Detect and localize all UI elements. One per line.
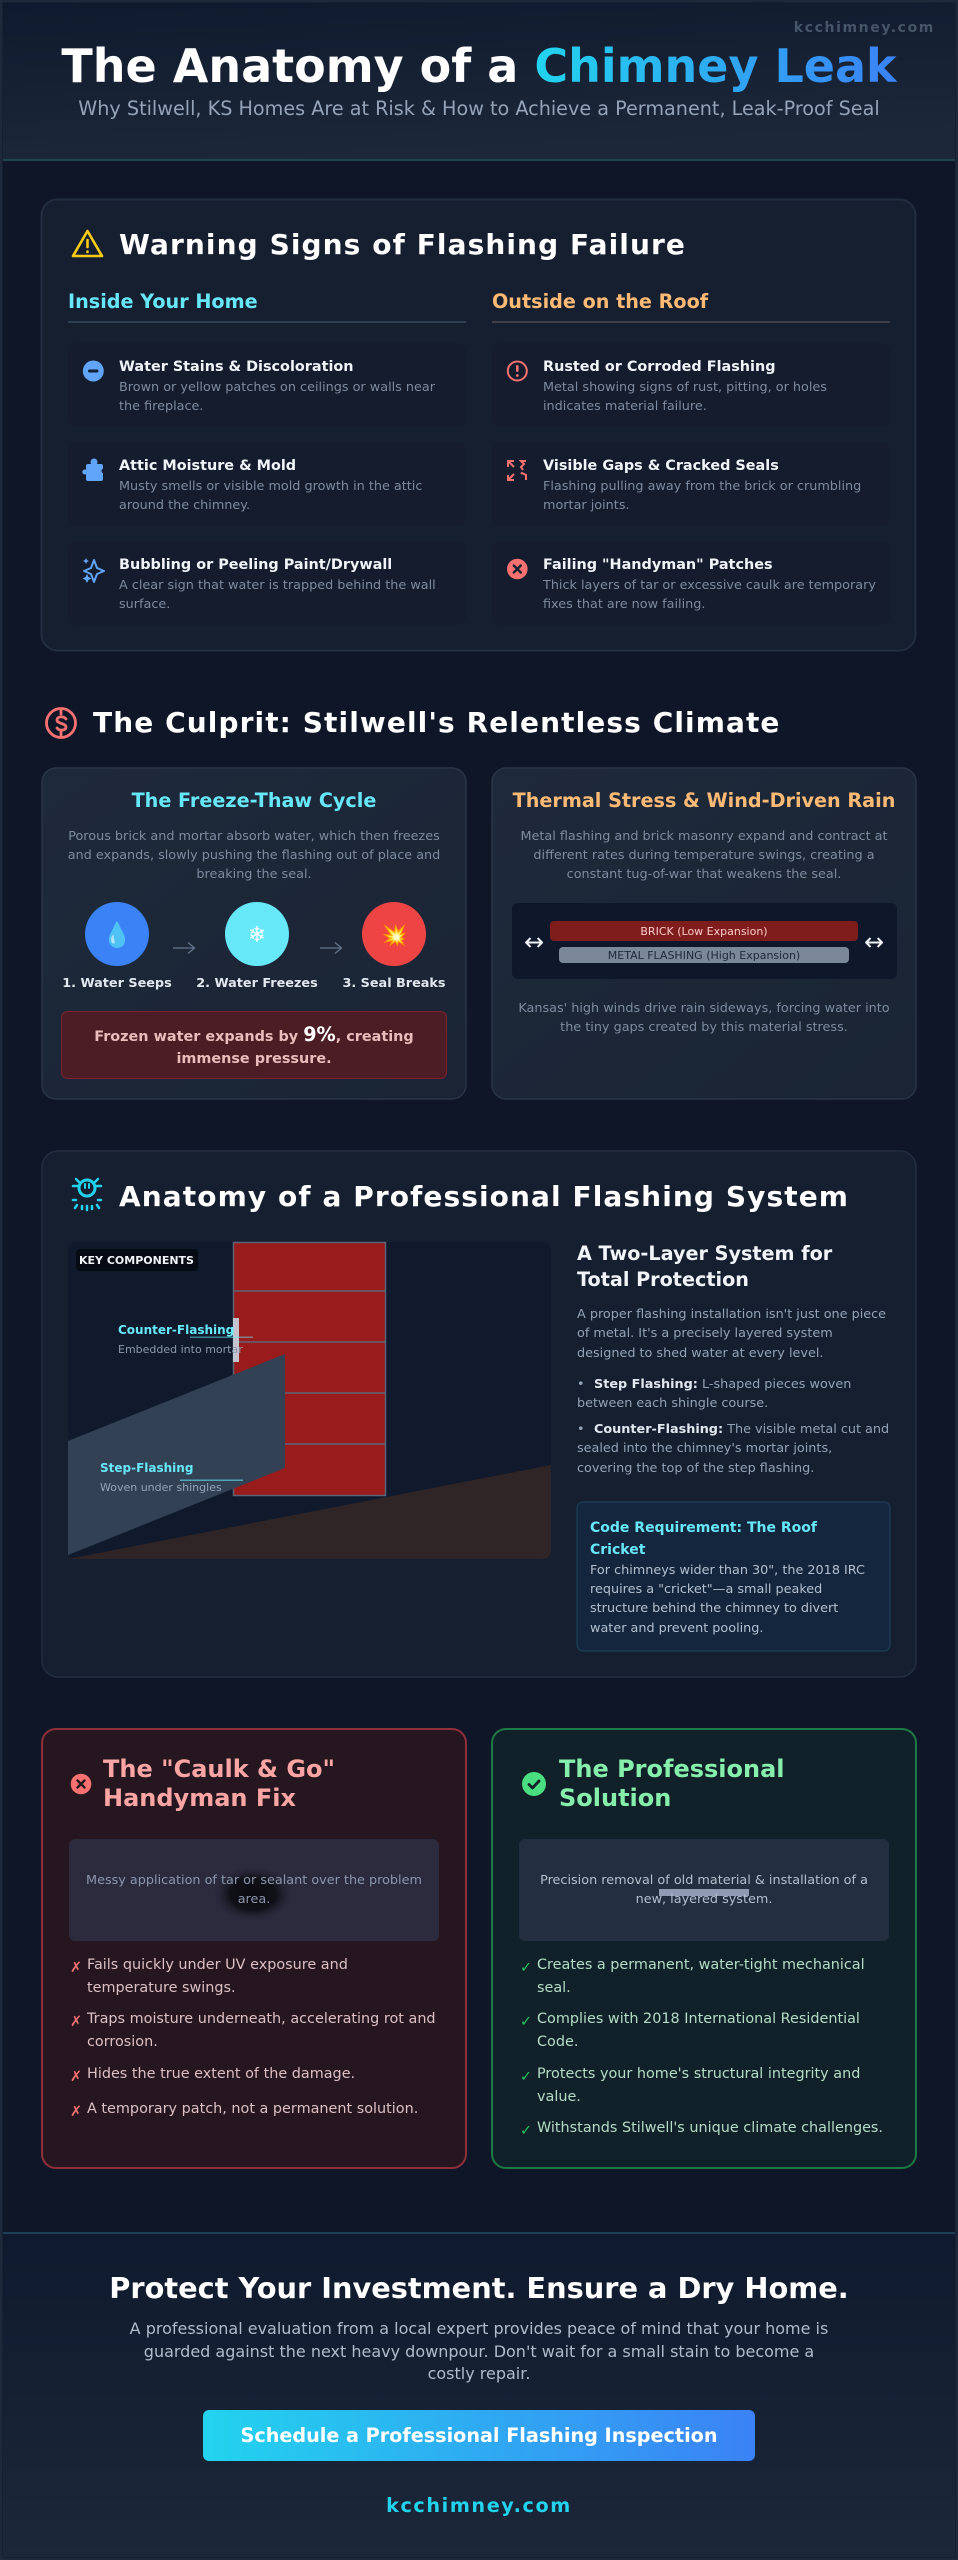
call to action text: guarded against the next heavy downpour. Don't wait for a small stain to become a xyxy=(144,2342,814,2361)
heading: Anatomy of a Professional Flashing System xyxy=(119,1180,849,1213)
panel: anatomy xyxy=(42,1151,916,1677)
key components label xyxy=(76,1249,198,1271)
item: rusted flashing: Rusted or Corroded Flashing xyxy=(543,359,776,375)
text: two-layer system: between each shingle course. xyxy=(577,1396,768,1411)
heading xyxy=(559,1755,785,1812)
illustration: Precision removal of old material & installation of a xyxy=(540,1873,868,1888)
icon: warning triangle xyxy=(73,231,102,256)
list: benefits: value. xyxy=(537,2089,581,2105)
illustration: new, layered system. xyxy=(636,1892,772,1907)
list: benefits: ✓ xyxy=(520,2069,532,2085)
section: climate xyxy=(42,706,916,1099)
item: rusted flashing xyxy=(492,343,890,427)
callout: immense pressure. xyxy=(176,1051,332,1067)
panel: freeze-thaw xyxy=(42,768,466,1099)
list: benefits xyxy=(520,1957,883,2139)
text: two-layer system xyxy=(577,1242,889,1476)
callout: Frozen water expands by 9%, creating xyxy=(94,1023,414,1046)
description: constant tug-of-war that weakens the seal. xyxy=(567,867,841,882)
item: bubbling paint xyxy=(68,541,466,625)
step 2 xyxy=(196,902,318,991)
list: drawbacks: ✗ xyxy=(70,2104,82,2120)
watermark: kcchimney.com xyxy=(794,20,935,36)
description: Metal flashing and brick masonry expand and contract at xyxy=(520,829,888,844)
panel: thermal stress xyxy=(492,768,916,1099)
description: different rates during temperature swings, creating a xyxy=(533,848,875,863)
title: The Anatomy of a Chimney Leak xyxy=(61,39,898,93)
icon: check circle xyxy=(522,1772,546,1796)
list: drawbacks: ✗ xyxy=(70,1960,82,1976)
panel: caulk and go xyxy=(42,1729,466,2168)
item: attic moisture: Attic Moisture & Mold xyxy=(119,458,296,474)
panel: professional solution xyxy=(492,1729,916,2168)
chimney xyxy=(233,1242,386,1496)
text: two-layer system: Counter-Flashing: The visible metal cut and xyxy=(594,1422,889,1437)
callout: code requirement: water and prevent pooling. xyxy=(590,1621,763,1636)
step 3: 3. Seal Breaks xyxy=(342,976,446,991)
counter flashing xyxy=(233,1318,239,1362)
step 1: 1. Water Seeps xyxy=(62,976,172,991)
diagram: flashing layers xyxy=(68,1242,551,1559)
roof xyxy=(68,1465,551,1559)
button: Schedule a Professional Flashing Inspection xyxy=(240,2424,718,2447)
item: visible gaps xyxy=(492,442,890,526)
column heading: outside: Outside on the Roof xyxy=(492,290,709,313)
label: counter flashing: Embedded into mortar xyxy=(118,1343,243,1356)
text: two-layer system: A Two-Layer System for xyxy=(577,1242,833,1265)
list: benefits: Complies with 2018 International Residential xyxy=(537,2011,860,2027)
expansion diagram: ↔ xyxy=(524,928,544,956)
item: handyman patches: Failing "Handyman" Patches xyxy=(543,557,773,573)
heading: The Freeze-Thaw Cycle xyxy=(132,789,376,812)
description: Kansas' high winds drive rain sideways, forcing water into xyxy=(518,1001,890,1016)
text: two-layer system: Step Flashing: L-shaped pieces woven xyxy=(594,1377,851,1392)
list: benefits: seal. xyxy=(537,1980,571,1996)
expansion diagram: ↔ xyxy=(864,928,884,956)
item: rusted flashing: Metal showing signs of rust, pitting, or holes xyxy=(543,380,827,395)
heading: The Culprit: Stilwell's Relentless Climate xyxy=(93,706,781,739)
item: handyman patches xyxy=(492,541,890,625)
list: benefits: Creates a permanent, water-tight mechanical xyxy=(537,1957,865,1973)
text: two-layer system: designed to shed water at every level. xyxy=(577,1346,823,1361)
list: benefits: ✓ xyxy=(520,1960,532,1976)
text: two-layer system: • xyxy=(577,1422,585,1437)
key components label: KEY COMPONENTS xyxy=(79,1254,194,1267)
list: benefits: Withstands Stilwell's unique climate challenges. xyxy=(537,2120,883,2136)
text: two-layer system: Total Protection xyxy=(577,1268,749,1291)
description: breaking the seal. xyxy=(196,867,312,882)
item: visible gaps: Visible Gaps & Cracked Seals xyxy=(543,458,779,474)
label: counter flashing xyxy=(118,1323,253,1356)
list: drawbacks: Fails quickly under UV exposure and xyxy=(87,1957,348,1973)
heading: Handyman Fix xyxy=(103,1784,296,1812)
illustration: area. xyxy=(238,1892,270,1907)
heading: Warning Signs of Flashing Failure xyxy=(119,228,686,261)
list: benefits: ✓ xyxy=(520,2014,532,2030)
text: two-layer system: • xyxy=(577,1377,585,1392)
item: attic moisture: Musty smells or visible mold growth in the attic xyxy=(119,479,422,494)
list: benefits: Protects your home's structural integrity and xyxy=(537,2066,860,2082)
illustration xyxy=(69,1839,439,1941)
list: drawbacks xyxy=(70,1957,436,2120)
step 2: ❄ xyxy=(248,923,266,948)
button xyxy=(203,2410,755,2461)
subtitle: Why Stilwell, KS Homes Are at Risk & How to Achieve a Permanent, Leak-Proof Seal xyxy=(78,97,880,120)
list: drawbacks: A temporary patch, not a permanent solution. xyxy=(87,2101,418,2117)
list: benefits: Code. xyxy=(537,2034,578,2050)
list: drawbacks: Traps moisture underneath, accelerating rot and xyxy=(86,2011,436,2027)
call to action heading: Protect Your Investment. Ensure a Dry Home. xyxy=(109,2271,849,2305)
label: step flashing xyxy=(100,1461,243,1494)
expansion diagram xyxy=(512,903,897,979)
callout: code requirement xyxy=(577,1502,890,1651)
header xyxy=(3,3,955,161)
callout: code requirement: For chimneys wider than 30", the 2018 IRC xyxy=(590,1563,865,1578)
item: bubbling paint: Bubbling or Peeling Paint/Drywall xyxy=(119,557,392,573)
text: two-layer system: of metal. It's a precisely layered system xyxy=(577,1326,833,1341)
description: the tiny gaps created by this material stress. xyxy=(560,1020,848,1035)
callout: code requirement: structure behind the chimney to divert xyxy=(590,1601,838,1616)
list: drawbacks: ✗ xyxy=(70,2014,82,2030)
callout: code requirement: Cricket xyxy=(590,1542,646,1558)
item: bubbling paint: A clear sign that water is trapped behind the wall xyxy=(119,578,436,593)
item: attic moisture: around the chimney. xyxy=(119,498,250,513)
item: handyman patches: fixes that are now failing. xyxy=(543,597,705,612)
list: drawbacks: temperature swings. xyxy=(87,1980,236,1996)
item: water stains xyxy=(68,343,466,427)
expansion diagram: BRICK (Low Expansion) xyxy=(640,925,768,938)
list: drawbacks: ✗ xyxy=(70,2069,82,2085)
panel: warning signs xyxy=(42,200,916,650)
icon: dollar circle xyxy=(46,708,76,738)
step 2: 2. Water Freezes xyxy=(196,976,318,991)
item: visible gaps: Flashing pulling away from the brick or crumbling xyxy=(543,479,861,494)
icon: bug xyxy=(73,1179,101,1210)
heading xyxy=(103,1755,335,1812)
illustration xyxy=(519,1839,889,1941)
description: and expands, slowly pushing the flashing out of place and xyxy=(68,848,440,863)
heading: The Professional xyxy=(559,1755,785,1783)
heading: Solution xyxy=(559,1784,671,1812)
description: Porous brick and mortar absorb water, which then freezes xyxy=(68,829,440,844)
icon: x circle xyxy=(71,1774,91,1794)
item: water stains: Water Stains & Discoloration xyxy=(119,359,354,375)
text: two-layer system: covering the top of the step flashing. xyxy=(577,1461,814,1476)
callout: code requirement: requires a "cricket"—a small peaked xyxy=(590,1582,822,1597)
call to action text: costly repair. xyxy=(428,2364,530,2383)
list: drawbacks: Hides the true extent of the damage. xyxy=(87,2066,355,2082)
label: step flashing: Step-Flashing xyxy=(100,1461,193,1475)
step 1 xyxy=(62,902,172,991)
item: water stains: the fireplace. xyxy=(119,399,203,414)
list: drawbacks: corrosion. xyxy=(87,2034,158,2050)
heading: The "Caulk & Go" xyxy=(103,1755,335,1783)
step 3: 💥 xyxy=(379,921,409,949)
item: attic moisture xyxy=(68,442,466,526)
label: step flashing: Woven under shingles xyxy=(100,1481,222,1494)
list: benefits: ✓ xyxy=(520,2123,532,2139)
label: counter flashing: Counter-Flashing xyxy=(118,1323,234,1337)
description xyxy=(520,829,888,882)
step 3 xyxy=(342,902,446,991)
illustration: Messy application of tar or sealant over the problem xyxy=(86,1873,422,1888)
item: handyman patches: Thick layers of tar or excessive caulk are temporary xyxy=(542,578,876,593)
callout xyxy=(62,1012,446,1078)
item: water stains: Brown or yellow patches on ceilings or walls near xyxy=(119,380,436,395)
item: bubbling paint: surface. xyxy=(119,597,170,612)
heading: Thermal Stress & Wind-Driven Rain xyxy=(513,789,895,812)
text: two-layer system: sealed into the chimney's mortar joints, xyxy=(577,1441,832,1456)
website: kcchimney.com xyxy=(386,2494,572,2517)
item: rusted flashing: indicates material failure. xyxy=(543,399,707,414)
text: two-layer system: A proper flashing installation isn't just one piece xyxy=(577,1307,886,1322)
callout: code requirement: Code Requirement: The Roof xyxy=(590,1520,818,1536)
description xyxy=(518,1001,890,1035)
step flashing xyxy=(68,1354,285,1555)
call to action text: A professional evaluation from a local expert provides peace of mind that your home is xyxy=(130,2319,828,2338)
call to action text xyxy=(130,2319,828,2383)
arrow xyxy=(320,942,342,954)
arrow xyxy=(173,942,194,954)
column heading: inside: Inside Your Home xyxy=(68,290,258,313)
footer xyxy=(3,2232,955,2557)
expansion diagram: METAL FLASHING (High Expansion) xyxy=(608,949,800,962)
step 1: 💧 xyxy=(102,921,132,949)
item: visible gaps: mortar joints. xyxy=(543,498,630,513)
description xyxy=(68,829,440,882)
